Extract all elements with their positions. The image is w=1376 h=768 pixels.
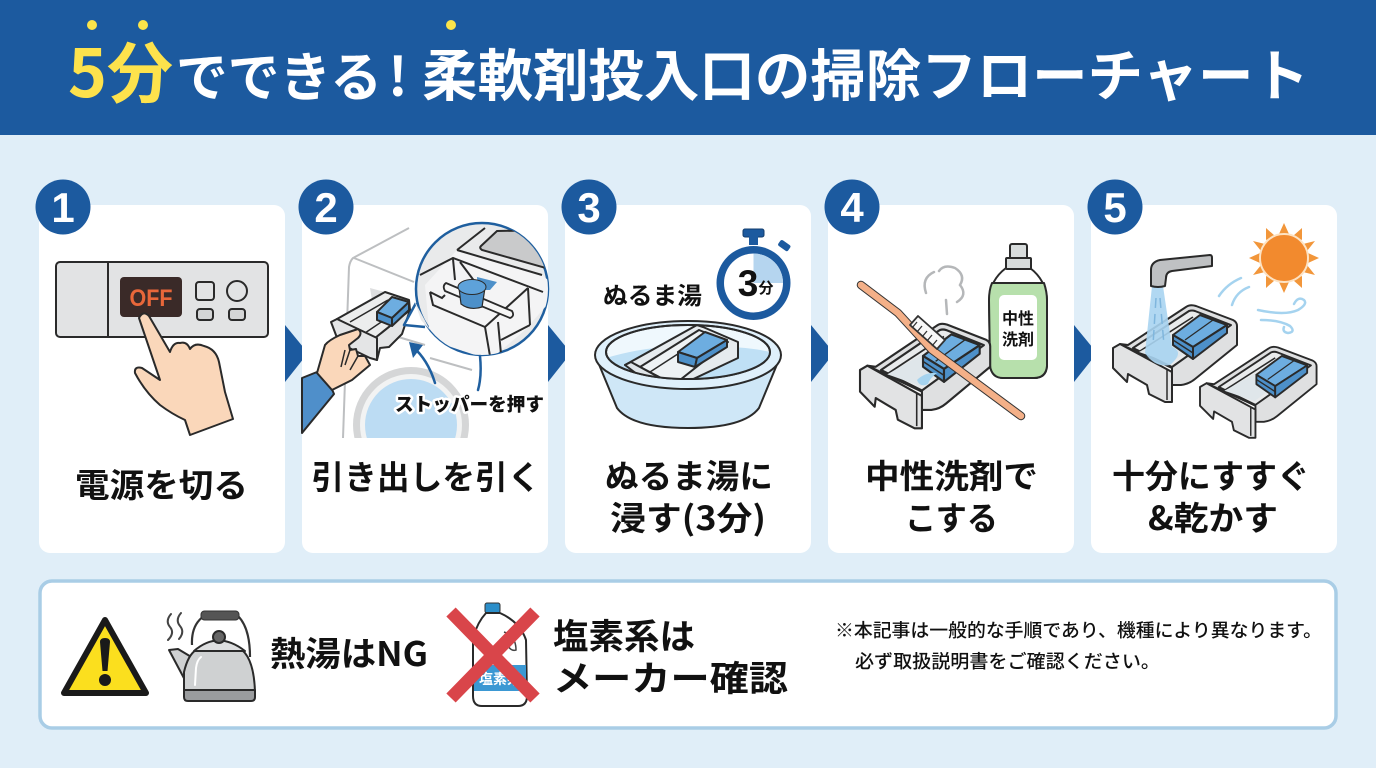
icon: kettle — [168, 611, 255, 701]
panel: step 5 rinse and dry — [1088, 180, 1337, 553]
icon: warning triangle — [64, 620, 146, 693]
step number 3: 3 — [577, 184, 601, 231]
label — [605, 450, 773, 540]
step number 5 — [1088, 180, 1142, 234]
water drop — [917, 373, 937, 385]
step number 5: 5 — [1103, 184, 1127, 231]
title: ! — [388, 36, 408, 112]
arrow 1 — [285, 325, 308, 382]
icon: pressing hand — [135, 313, 233, 435]
arrow 4 — [1074, 325, 1097, 382]
icon: bleach bottle crossed out: 塩素系 — [479, 669, 521, 689]
footnote — [835, 617, 1322, 674]
arm and hand — [302, 329, 370, 433]
icon: faucet — [1151, 255, 1212, 287]
title: 5分 — [68, 21, 173, 117]
label: 十分にすすぐ — [1112, 450, 1310, 498]
icon: control panel — [56, 262, 268, 337]
icon: toothbrush — [861, 285, 1021, 416]
panel: step 4 scrub — [824, 180, 1074, 553]
callout label: ストッパーを押す — [395, 391, 544, 417]
step number 1: 1 — [51, 184, 75, 231]
icon: stopwatch: 分 — [758, 277, 774, 298]
icon: stopwatch — [716, 229, 791, 320]
icon: detergent bottle: 中性 — [1002, 305, 1034, 329]
panel: warnings — [40, 581, 1336, 728]
text: chlorine: 塩素系は — [553, 609, 695, 660]
icon: control panel: OFF — [130, 285, 172, 312]
step number 1 — [36, 180, 90, 234]
label: 電源を切る — [75, 459, 248, 507]
icon: stopwatch: 3 — [738, 263, 758, 304]
title — [68, 20, 1309, 117]
header band — [0, 0, 1376, 135]
illustration: washer with drawer — [301, 222, 550, 438]
icon: detergent bottle: 洗剤 — [1002, 326, 1034, 350]
arrow 3 — [811, 325, 834, 382]
label: &乾かす — [1148, 492, 1278, 540]
step number 2: 2 — [314, 184, 338, 231]
step number 2 — [298, 180, 354, 234]
arrow 2 — [548, 325, 571, 382]
step number 4 — [824, 180, 880, 234]
step number 4: 4 — [840, 184, 864, 231]
icon: sun — [1249, 223, 1319, 293]
icon: wind — [1219, 278, 1305, 333]
text: lukewarm water: ぬるま湯 — [603, 276, 702, 311]
callout: zoom circle — [404, 223, 560, 360]
label: 引き出しを引く — [312, 451, 540, 499]
label — [1112, 450, 1310, 540]
icon: drawer being rinsed — [1113, 305, 1237, 402]
label: 浸す(3分) — [610, 492, 766, 540]
red cross — [451, 612, 535, 698]
footnote: 必ず取扱説明書をご確認ください。 — [855, 648, 1160, 674]
step number 3 — [562, 180, 616, 234]
label: ぬるま湯に — [605, 450, 773, 498]
icon: water stream — [1145, 286, 1178, 366]
icon: detergent bottle — [989, 244, 1047, 378]
arrows to stopper — [409, 342, 481, 390]
icon: bleach bottle crossed out — [451, 603, 535, 706]
label: こする — [905, 492, 998, 540]
icon: drawer — [860, 324, 990, 428]
label — [865, 450, 1038, 540]
text: chlorine: メーカー確認 — [553, 651, 788, 702]
icon: drying drawer — [1200, 347, 1317, 438]
text: chlorine — [553, 609, 788, 702]
text: hot water NG: 熱湯はNG — [270, 627, 428, 676]
icon: basin with drawer — [595, 321, 781, 428]
panel: step 1 power off — [36, 180, 285, 553]
title: でできる — [176, 36, 382, 112]
panel: step 3 soak — [562, 180, 811, 553]
title: 柔軟剤投入口の掃除フローチャート — [422, 32, 1309, 113]
label: 中性洗剤で — [865, 450, 1038, 498]
panel: step 2 pull drawer — [298, 180, 560, 553]
icon: scrub cloud — [925, 267, 963, 314]
footnote: ※本記事は一般的な手順であり、機種により異なります。 — [835, 617, 1322, 643]
